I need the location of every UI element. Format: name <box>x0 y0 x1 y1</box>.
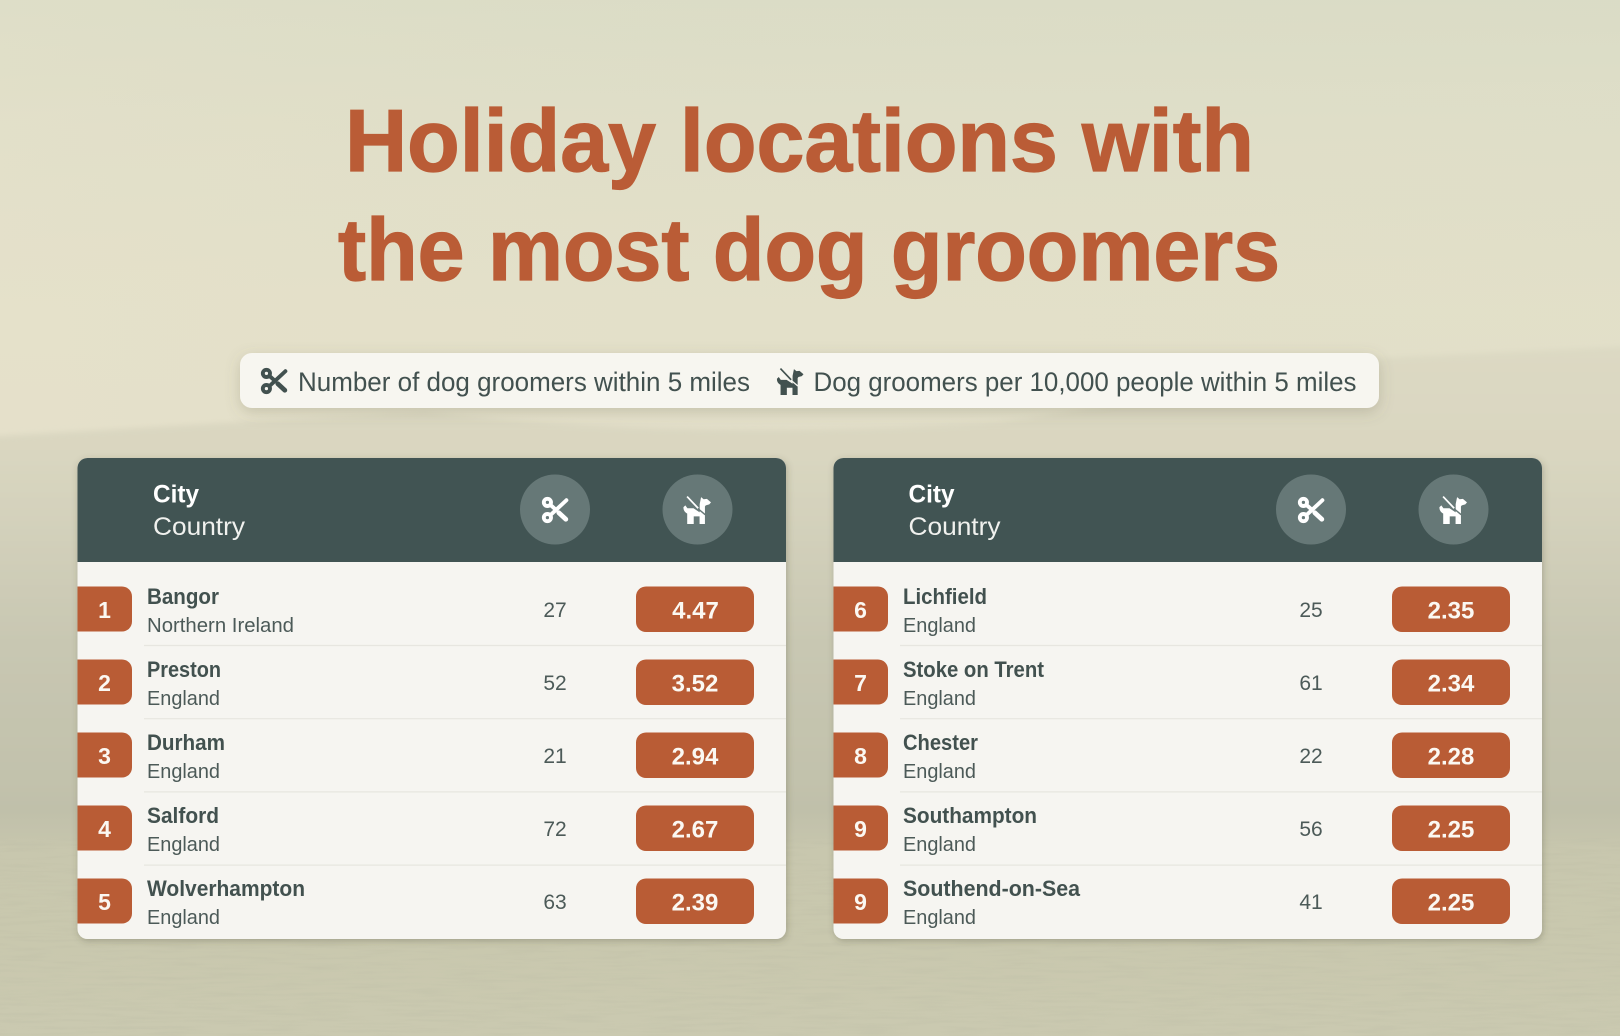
row 3: 21 <box>543 745 567 768</box>
row 4: Salford <box>147 803 219 828</box>
table header <box>78 458 786 562</box>
table header <box>834 458 1542 562</box>
row 9: Southampton <box>903 803 1037 828</box>
row 4: 72 <box>543 818 567 841</box>
row 1: 4.47 <box>672 598 719 624</box>
row 8: 22 <box>1299 745 1323 768</box>
row 1: Northern Ireland <box>147 614 294 637</box>
row 5: Wolverhampton <box>147 876 305 901</box>
row 1: 27 <box>543 599 567 622</box>
row 4: 2.67 <box>672 816 718 844</box>
row 2: England <box>147 687 220 710</box>
legend text: number of groomers: Number of dog groomers within 5 miles <box>298 367 750 397</box>
row 3: England <box>147 760 220 783</box>
table header: Country <box>153 513 246 541</box>
row 3: 2.94 <box>672 744 719 770</box>
row 7 <box>834 657 1542 719</box>
row 9 <box>834 803 1542 865</box>
row 8: Chester <box>903 730 978 755</box>
row 5: England <box>147 906 220 929</box>
legend <box>240 353 1379 408</box>
row 1: Bangor <box>147 584 219 609</box>
title: the most dog groomers <box>338 200 1280 299</box>
row 7: 7 <box>854 670 867 696</box>
row 9: England <box>903 833 976 856</box>
panel: left table (ranks 1 to 5) <box>78 458 786 939</box>
row 10: 41 <box>1299 891 1323 914</box>
row 8: England <box>903 760 976 783</box>
row 8: 2.28 <box>1428 744 1474 770</box>
row 10: Southend-on-Sea <box>903 876 1081 901</box>
row 2 <box>78 657 786 719</box>
panel: right table (ranks 6 to 9) <box>834 458 1542 939</box>
table header: Country <box>908 513 1001 541</box>
row 10: 9 <box>854 889 867 915</box>
row 3 <box>78 730 786 792</box>
row 8 <box>834 730 1542 792</box>
row 7: Stoke on Trent <box>903 657 1045 682</box>
row 5: 2.39 <box>672 890 718 916</box>
row 3: 3 <box>98 743 111 769</box>
row 4 <box>78 803 786 865</box>
row 4: 4 <box>98 816 111 842</box>
row 4: England <box>147 833 220 856</box>
row 10: England <box>903 906 976 929</box>
row 5: 63 <box>543 891 567 914</box>
row 10: 2.25 <box>1428 890 1474 916</box>
row 7: 61 <box>1299 672 1323 695</box>
table header: City <box>153 480 199 508</box>
row 6 <box>834 584 1542 646</box>
row 6: 2.35 <box>1428 598 1474 624</box>
row 7: England <box>903 687 976 710</box>
row 6: 6 <box>854 597 867 623</box>
legend text: groomers per 10,000 people: Dog groomers per 10,000 people within 5 miles <box>814 367 1356 397</box>
row 8: 8 <box>854 743 867 769</box>
icon: dog legend <box>777 369 804 395</box>
row 5 <box>78 876 754 929</box>
row 6: England <box>903 614 976 637</box>
row 1: 1 <box>98 597 111 623</box>
row 6: 25 <box>1299 599 1323 622</box>
row 9: 56 <box>1299 818 1323 841</box>
row 5: 5 <box>98 889 111 915</box>
row 10 <box>834 876 1510 929</box>
row 3: Durham <box>147 730 225 755</box>
title: Holiday locations with <box>345 91 1254 190</box>
row 2: 52 <box>543 672 567 695</box>
row 7: 2.34 <box>1428 670 1475 698</box>
row 1 <box>78 584 786 646</box>
row 2: 2 <box>98 670 111 696</box>
row 6: Lichfield <box>903 584 987 609</box>
title <box>338 91 1280 299</box>
row 2: 3.52 <box>672 670 718 698</box>
table header: City <box>908 480 955 508</box>
row 9: 2.25 <box>1428 816 1474 844</box>
icon: scissors legend <box>263 370 285 392</box>
row 9: 9 <box>854 816 867 842</box>
row 2: Preston <box>147 657 221 682</box>
